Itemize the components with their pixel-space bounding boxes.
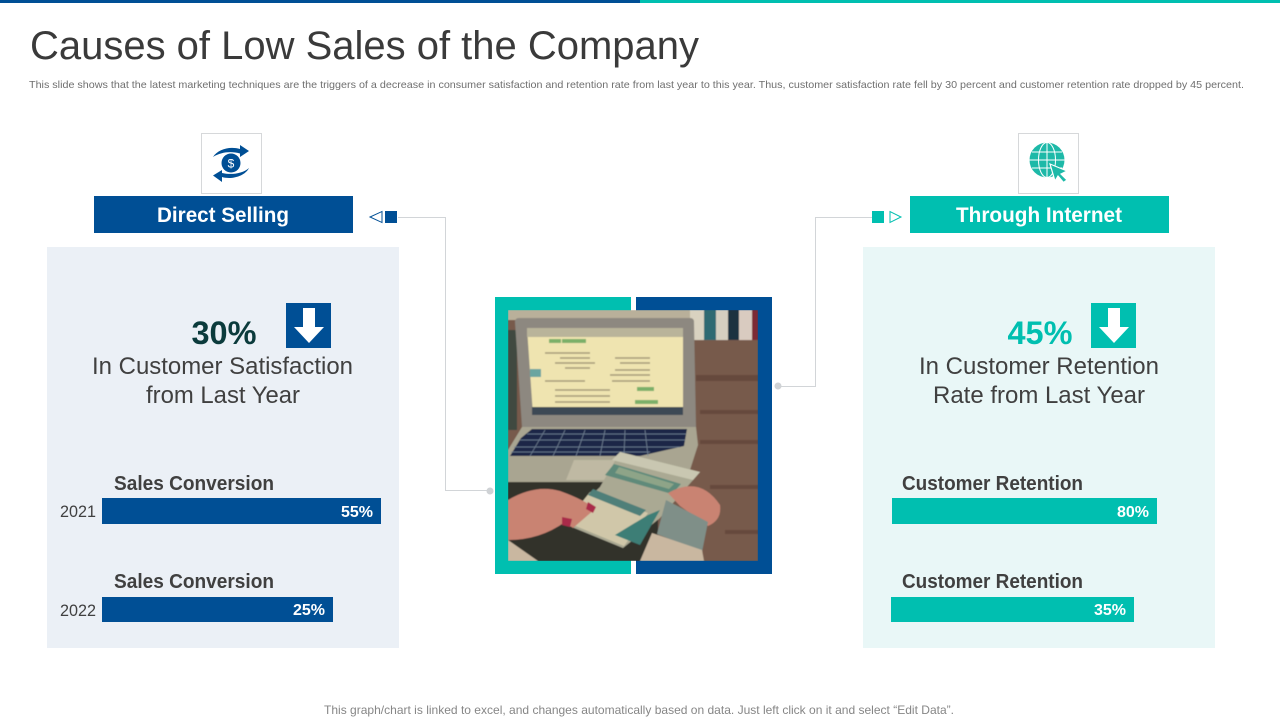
icon: down arrow blue (286, 303, 331, 348)
icon: down arrow teal (1091, 303, 1136, 348)
satisfaction text: from Last Year (146, 382, 300, 409)
connector: left (398, 218, 494, 494)
bar chart: sales conversion 2021 (60, 473, 381, 524)
image frame (495, 297, 772, 574)
satisfaction text (92, 353, 353, 409)
photo: laptop and calculator (508, 310, 758, 561)
retention text (919, 353, 1159, 409)
heading: through internet (910, 196, 1169, 233)
bar chart: sales conversion 2022: 25% (293, 602, 325, 619)
bar chart: customer retention 35 percent: 35% (1094, 602, 1126, 619)
footer note: This graph/chart is linked to excel, and changes automatically based on data. Just left click on it and select “Edit Data”. (324, 703, 954, 717)
marker: left connector end (370, 211, 397, 223)
icon: money eye with arrows (202, 134, 262, 194)
satisfaction text: In Customer Satisfaction (92, 353, 353, 380)
bar chart: customer retention 35 percent: Customer Retention (902, 571, 1083, 593)
heading: direct selling: Direct Selling (157, 204, 289, 227)
bar chart: sales conversion 2021: 2021 (60, 502, 96, 521)
panel: through internet (863, 247, 1215, 648)
bar chart: sales conversion 2021: Sales Conversion (114, 473, 274, 495)
bar chart: sales conversion 2022: 2022 (60, 601, 96, 620)
bar chart: customer retention 80 percent: Customer Retention (902, 473, 1083, 495)
icon: globe with cursor (1018, 134, 1078, 194)
icon: money eye with arrows: $ (228, 156, 235, 170)
title: Causes of Low Sales of the Company (30, 24, 699, 68)
heading: direct selling (94, 196, 353, 233)
heading: through internet: Through Internet (956, 204, 1122, 227)
retention text: In Customer Retention (919, 353, 1159, 380)
panel: direct selling (47, 247, 399, 648)
marker: right connector end (872, 211, 901, 223)
stat: 30 percent: 30% (192, 315, 256, 351)
connector: right (774, 218, 872, 390)
bar chart: sales conversion 2022: Sales Conversion (114, 571, 274, 593)
retention text: Rate from Last Year (933, 382, 1145, 409)
bar chart: sales conversion 2022 (60, 571, 333, 622)
bar chart: customer retention 80 percent (892, 473, 1157, 524)
stat: 45 percent: 45% (1008, 315, 1072, 351)
bar chart: sales conversion 2021: 55% (341, 504, 373, 521)
bar chart: customer retention 80 percent: 80% (1117, 504, 1149, 521)
top accent bar (0, 0, 1280, 3)
bar chart: customer retention 35 percent (891, 571, 1134, 622)
subtitle description: This slide shows that the latest marketing techniques are the triggers of a decrease in consumer satisfaction and retention rate from last year to this year. Thus, customer satisfaction rate fell by 30 percent and customer retention rate dropped by 45 percent. (29, 79, 1244, 91)
